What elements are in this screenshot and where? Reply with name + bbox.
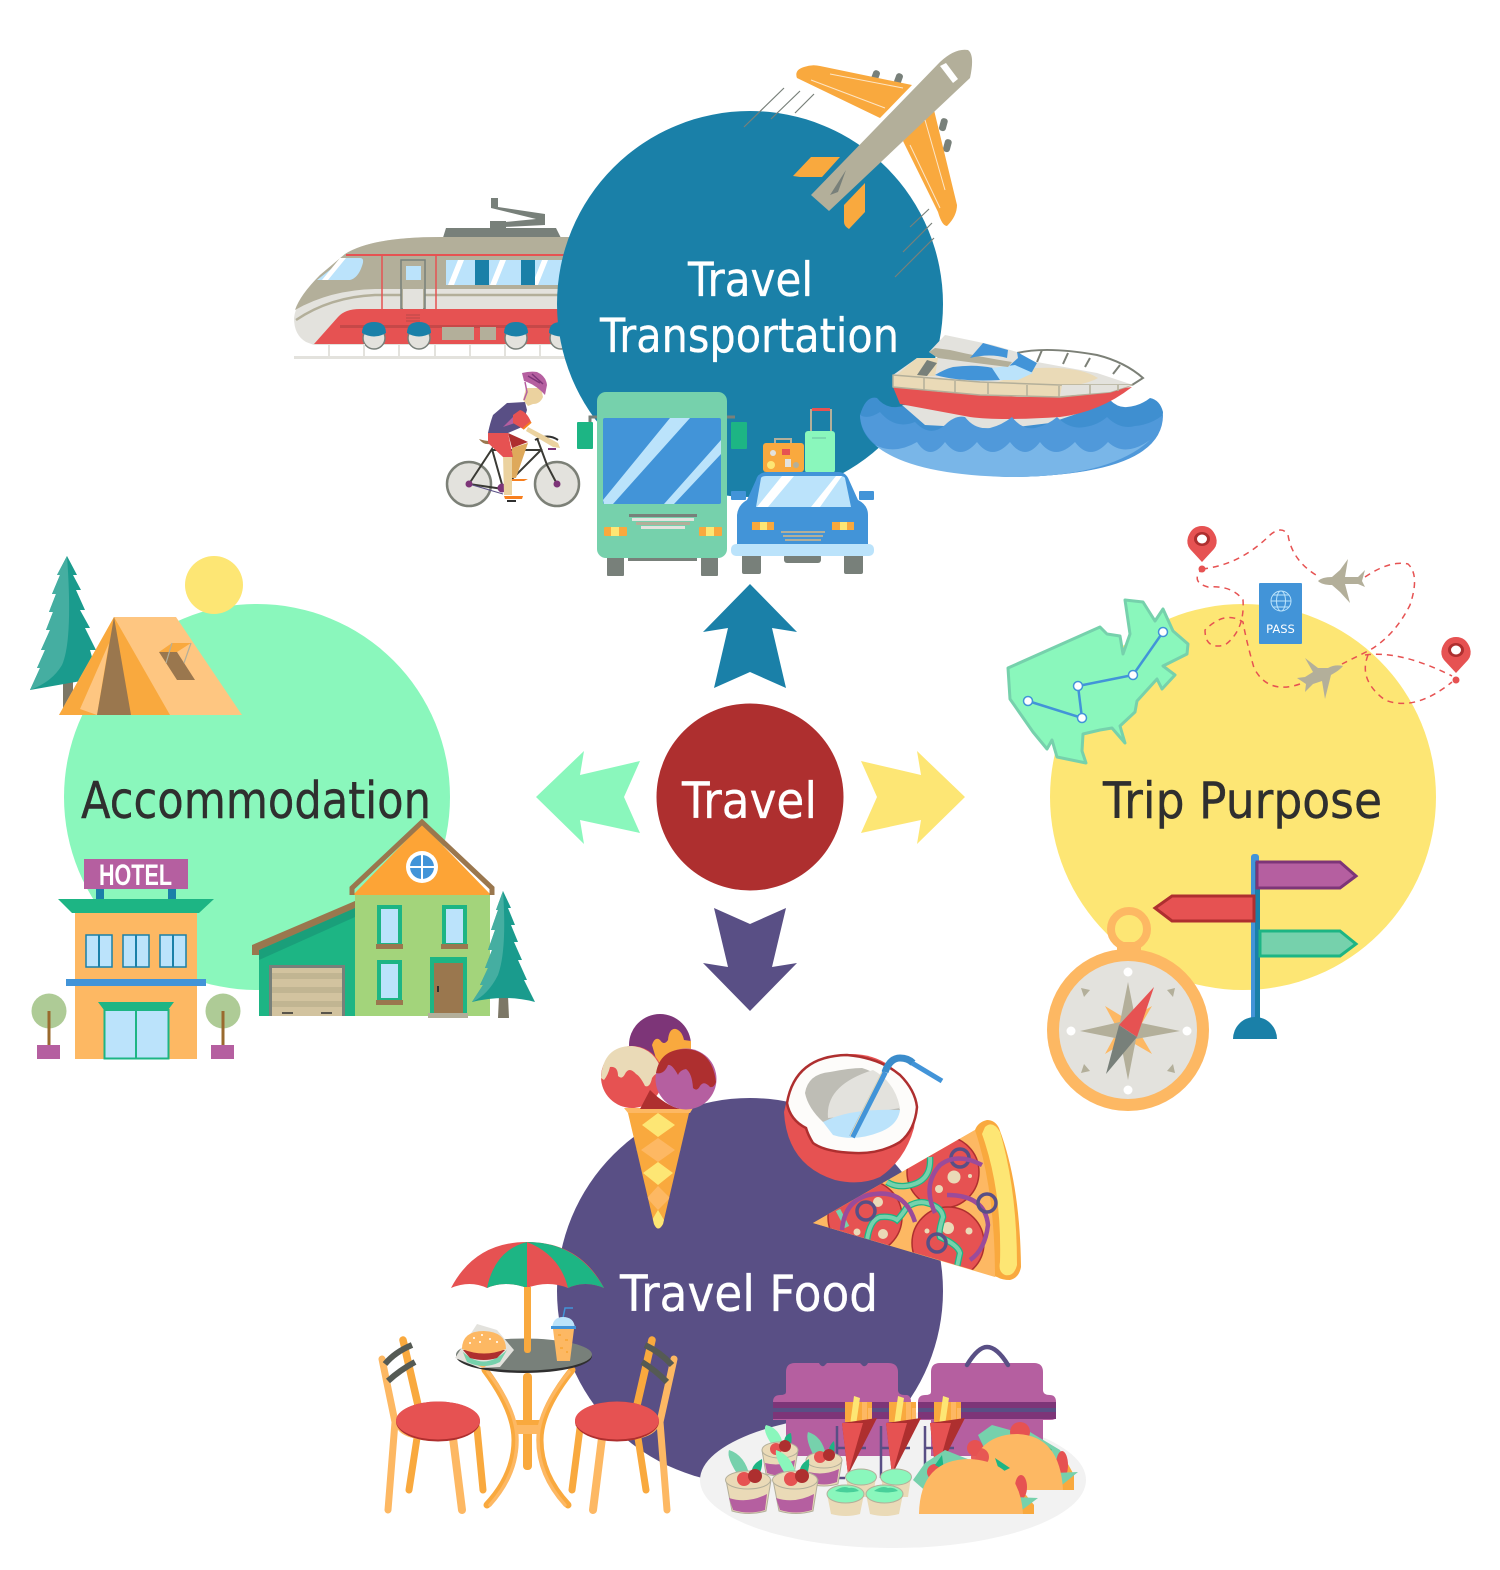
icon: speedboat on waves [860,335,1163,477]
illustration: train [294,198,575,359]
arrow: up to transportation [703,584,797,688]
icon: hotel building: HOTEL [99,859,172,892]
icon: airplane [744,50,972,277]
icon: airplane lower [1297,658,1343,699]
circle: travel transportation [557,111,943,497]
icon: map pin right [1441,637,1471,684]
icon: passport [1259,583,1302,644]
icon: pine tree right [472,891,535,1018]
heading: trip purpose: Trip Purpose [1102,772,1382,830]
circle: trip purpose [1050,604,1436,990]
icon: car with luggage [731,408,874,574]
icon: passport: PASS [1266,622,1295,636]
icon: lunch box left [773,1363,911,1456]
heading: travel transportation [599,253,899,364]
icon: tent [59,617,242,715]
icon: potted plant right [206,994,240,1059]
icon: signpost [1155,854,1356,1039]
circle: accommodation [64,604,450,990]
heading: accommodation: Accommodation [81,772,431,831]
circle: travel food [557,1098,943,1484]
heading: travel: Travel [681,772,817,830]
icon: pine tree left [30,556,98,710]
icon: bus [577,392,747,576]
illustration: food platter [700,1347,1086,1548]
arrow: left to accommodation [536,751,640,844]
icon: lunch box right [918,1363,1056,1456]
icon: dessert cups [726,1425,842,1514]
icon: map with route [1008,600,1188,763]
icon: hotel building [58,859,214,1059]
icon: drink cup [551,1308,576,1361]
arrow: down to food [703,908,797,1011]
icon: chair right [572,1340,674,1510]
icon: potted plant left [32,994,66,1059]
icon: coconut drink [784,1054,942,1182]
illustration: cafe table with umbrella [451,1242,604,1505]
icon: dashed travel route [1197,530,1452,703]
icon: airplane upper [1318,559,1365,603]
icon: ice cream cone [601,1014,716,1230]
icon: cyclist [447,372,579,506]
icon: pizza slice [813,1120,1021,1280]
circle: travel hub [656,704,844,890]
heading: travel food: Travel Food [619,1265,878,1323]
heading: travel transportation: Transportation [599,309,899,364]
icon: taco back [967,1422,1078,1490]
icon: house with garage [252,822,492,1018]
icon: jelly cups [827,1469,912,1516]
heading: travel transportation: Travel [687,253,813,308]
icon: map pin left [1187,526,1217,572]
icon: burger [455,1324,514,1368]
icon: chair left [382,1340,483,1510]
icon: taco front [913,1448,1038,1514]
arrow: right to trip purpose [861,751,965,844]
icon: compass [1047,911,1209,1111]
icon: sun [185,556,243,614]
